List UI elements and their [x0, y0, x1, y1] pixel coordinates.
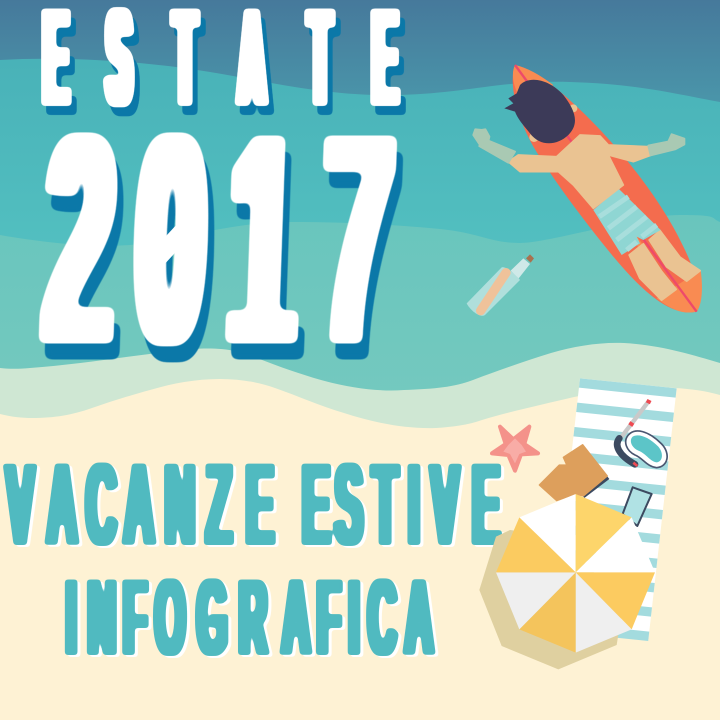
year digits: 2017	[40, 74, 397, 406]
man's legs	[629, 231, 700, 300]
illustration: surfer on board	[473, 65, 702, 313]
hair	[504, 80, 575, 143]
flippers	[539, 445, 608, 501]
subtitle letters: INFOGRAFICA	[66, 558, 433, 678]
background: foam	[0, 343, 720, 720]
towel	[552, 378, 677, 641]
illustration: message in a bottle	[467, 254, 534, 316]
man's torso and arms	[508, 135, 652, 208]
background: sand	[0, 379, 720, 720]
beach umbrella	[496, 494, 655, 653]
phone	[623, 487, 652, 526]
year shadow: 2017	[46, 90, 403, 422]
subtitle: VACANZE ESTIVE	[6, 442, 503, 571]
ears	[529, 104, 577, 142]
slash across the zero	[158, 232, 182, 258]
bottle neck	[511, 258, 530, 278]
illustration: beach items	[479, 378, 677, 669]
title: ESTATE	[44, 0, 402, 143]
bottle glass	[467, 267, 520, 316]
wet forearms and hands	[473, 129, 684, 163]
subtitle letters: VACANZE ESTIVE	[6, 442, 500, 569]
background: sea wave 2	[0, 215, 720, 720]
umbrella shadow	[479, 530, 623, 669]
swim shorts	[593, 188, 661, 255]
diving mask	[626, 431, 667, 468]
rolled message	[481, 273, 506, 311]
subtitle shadow: VACANZE ESTIVE	[9, 444, 503, 571]
surfboard	[513, 65, 702, 313]
starfish	[492, 427, 538, 471]
subtitle shadow: INFOGRAFICA	[69, 560, 436, 680]
title: 2017	[40, 74, 403, 422]
cork	[526, 254, 534, 263]
snorkel	[617, 401, 651, 466]
subtitle: INFOGRAFICA	[66, 558, 436, 680]
